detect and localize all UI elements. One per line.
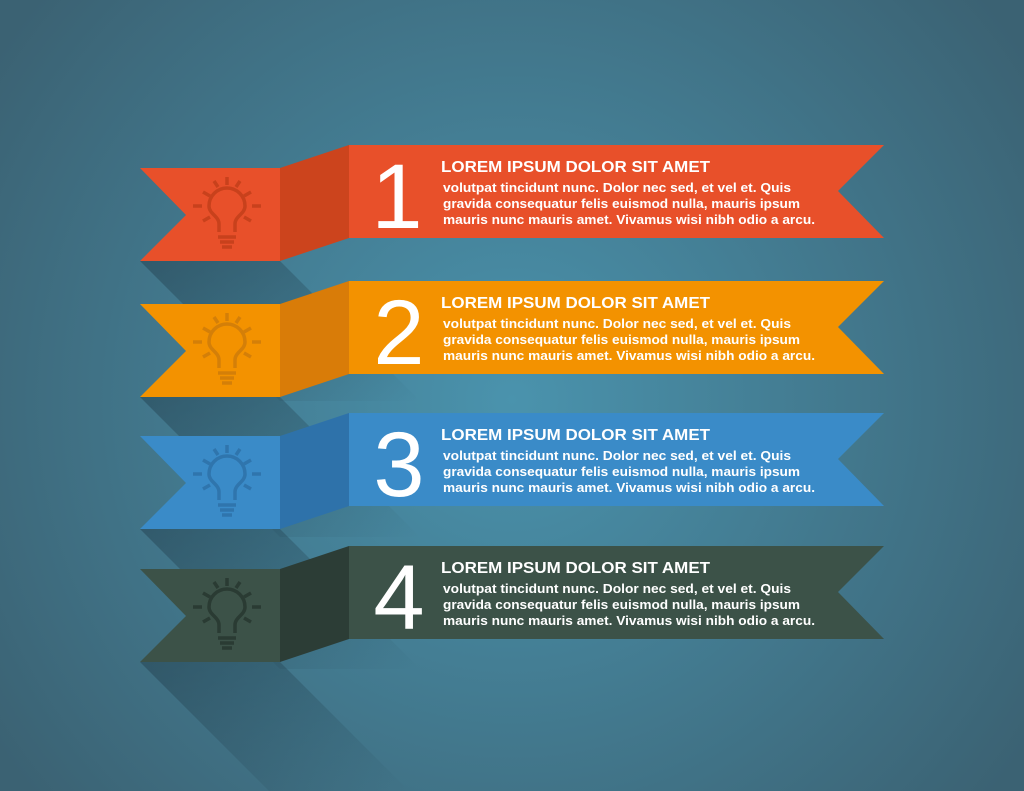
ribbon 2: gravida consequatur felis euismod nulla, mauris ipsum: [443, 333, 800, 347]
heading: LOREM IPSUM DOLOR SIT AMET: [441, 159, 710, 176]
ribbon 4: gravida consequatur felis euismod nulla, mauris ipsum: [443, 598, 800, 612]
ribbon 3: mauris nunc mauris amet. Vivamus wisi nibh odio a arcu.: [443, 481, 815, 495]
number: 4: [373, 547, 425, 649]
heading: LOREM IPSUM DOLOR SIT AMET: [441, 560, 710, 577]
ribbon 3: [140, 413, 884, 529]
body text: volutpat tincidunt nunc. Dolor nec sed, et vel et. Quis: [443, 317, 791, 331]
body text: volutpat tincidunt nunc. Dolor nec sed, et vel et. Quis: [443, 582, 791, 596]
ribbon 4: mauris nunc mauris amet. Vivamus wisi nibh odio a arcu.: [443, 614, 815, 628]
ribbon 3: gravida consequatur felis euismod nulla, mauris ipsum: [443, 465, 800, 479]
heading: LOREM IPSUM DOLOR SIT AMET: [441, 427, 710, 444]
ribbon 4: [140, 546, 884, 662]
icon: lightbulb: [193, 445, 261, 515]
icon: lightbulb: [193, 313, 261, 383]
number: 3: [373, 414, 425, 516]
number: 2: [373, 282, 425, 384]
body text: volutpat tincidunt nunc. Dolor nec sed, et vel et. Quis: [443, 449, 791, 463]
icon: lightbulb: [193, 578, 261, 648]
ribbon 2: [140, 281, 884, 397]
ribbon 2: mauris nunc mauris amet. Vivamus wisi nibh odio a arcu.: [443, 349, 815, 363]
shadows: [140, 261, 420, 791]
body text: volutpat tincidunt nunc. Dolor nec sed, et vel et. Quis: [443, 181, 791, 195]
number: 1: [371, 146, 423, 248]
heading: LOREM IPSUM DOLOR SIT AMET: [441, 295, 710, 312]
icon: lightbulb: [193, 177, 261, 247]
ribbon 1: mauris nunc mauris amet. Vivamus wisi nibh odio a arcu.: [443, 213, 815, 227]
ribbon 1: gravida consequatur felis euismod nulla, mauris ipsum: [443, 197, 800, 211]
ribbon 1: [140, 145, 884, 261]
